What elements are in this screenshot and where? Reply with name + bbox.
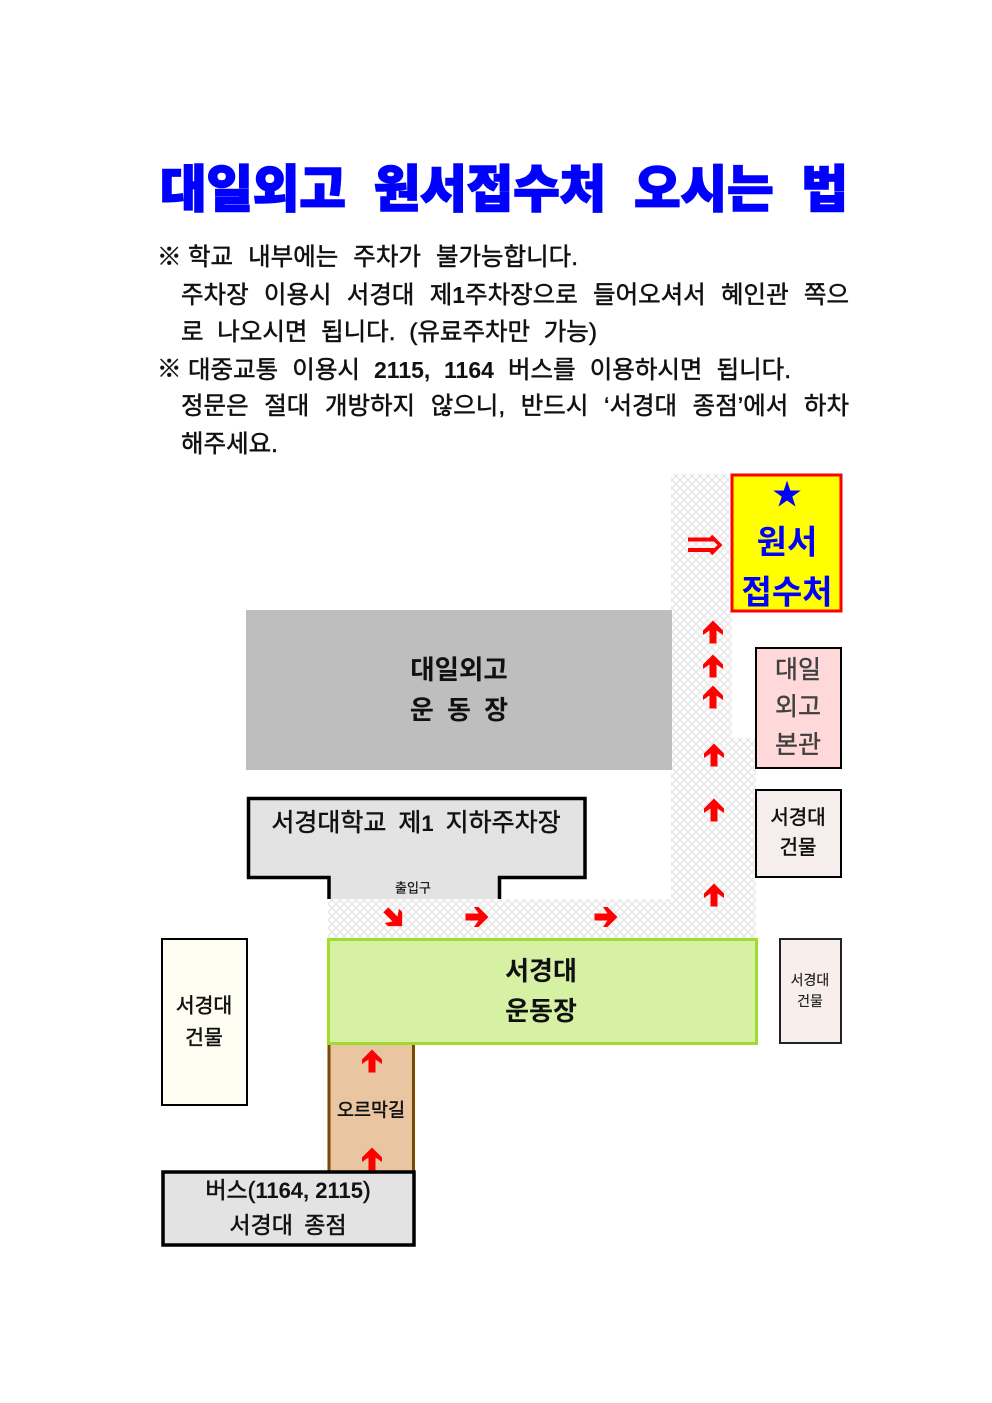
panel: Seokyeong building far right: 서경대 <box>791 972 829 988</box>
panel: Seokyeong building left: 건물 <box>185 1026 223 1050</box>
panel: Daeil main building: 외고 <box>775 693 821 721</box>
panel: Seokyeong sports ground <box>328 940 756 1044</box>
panel: Seokyeong building left <box>162 939 247 1105</box>
arrows: route direction <box>362 620 724 1170</box>
panel: Seokyeong building far right <box>780 939 841 1043</box>
panel: bus stop: 버스(1164, 2115) <box>205 1177 371 1203</box>
panel: Daeil main building: 본관 <box>775 731 821 759</box>
panel: Seokyeong building right: 서경대 <box>770 806 826 829</box>
text block: parking notice: 학교 내부에는 주차가 불가능합니다. <box>188 244 578 271</box>
panel: Seokyeong building far right: 건물 <box>797 993 823 1009</box>
text block: public transport notice: ※ <box>157 356 182 383</box>
text block: parking notice: ※ <box>157 244 182 271</box>
panel: underground parking: 서경대학교 제1 지하주차장 <box>271 809 561 837</box>
text block: public transport notice <box>157 356 849 458</box>
panel: underground parking: 출입구 <box>395 880 431 896</box>
panel: uphill road: 오르막길 <box>337 1100 405 1120</box>
panel: Daeil field <box>246 610 672 770</box>
panel: Seokyeong sports ground: 서경대 <box>505 956 577 986</box>
text block: public transport notice: 대중교통 이용시 2115, 1164 버스를 이용하시면 됩니다. <box>188 357 791 384</box>
arrow: to application office <box>688 536 720 554</box>
panel: application office <box>732 474 841 611</box>
text block: public transport notice: 해주세요. <box>181 431 278 458</box>
walking route <box>328 474 756 938</box>
panel: Daeil field: 대일외고 <box>410 655 508 685</box>
text block: public transport notice: 정문은 절대 개방하지 않으니, 반드시 ‘서경대 종점’에서 하차 <box>181 393 849 420</box>
title: 대일외고 원서접수처 오시는 법 <box>160 161 848 218</box>
panel: bus stop: 서경대 종점 <box>229 1212 347 1238</box>
panel: application office: ★ <box>771 474 803 516</box>
panel: Seokyeong sports ground: 운동장 <box>505 996 577 1026</box>
panel: Seokyeong building right <box>756 790 841 877</box>
panel: Daeil field: 운 동 장 <box>410 695 508 725</box>
panel: underground parking <box>248 798 585 899</box>
panel: Seokyeong building left: 서경대 <box>176 994 232 1018</box>
text block: parking notice: 주차장 이용시 서경대 제1주차장으로 들어오셔서 혜인관 쪽으 <box>181 282 849 309</box>
panel: application office: 원서 <box>757 524 817 560</box>
panel: bus stop <box>163 1172 414 1245</box>
panel: application office: 접수처 <box>741 574 833 610</box>
text block: parking notice <box>157 244 849 346</box>
panel: Seokyeong building right: 건물 <box>780 836 816 859</box>
text block: parking notice: 로 나오시면 됩니다. (유료주차만 가능) <box>181 319 597 346</box>
panel: Daeil main building <box>756 648 841 768</box>
panel: uphill road <box>328 1045 414 1173</box>
panel: Daeil main building: 대일 <box>775 656 821 684</box>
